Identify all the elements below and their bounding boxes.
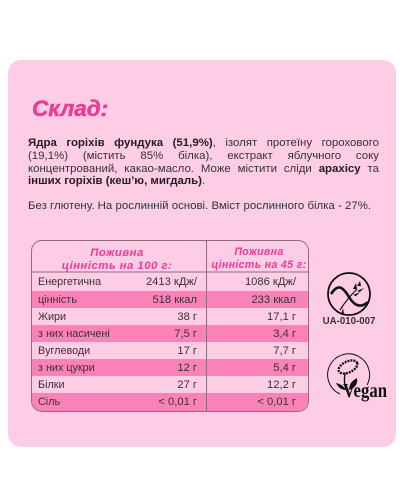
table header: per 100 g: Поживна [90, 247, 144, 259]
row: energy kcal [32, 291, 308, 308]
row: salt: < 0,01 г [158, 396, 197, 408]
table header: per 45 g: Поживна [234, 246, 284, 258]
row: energy kcal: 233 ккал [251, 294, 296, 306]
row: protein: 27 г [177, 379, 197, 391]
row: fat: Жири [38, 311, 66, 323]
row: sugars: 5,4 г [273, 362, 296, 374]
row: carbohydrates: 17 г [177, 345, 197, 357]
panel: composition background [8, 60, 396, 447]
row: energy: 2413 кДж/ [146, 276, 197, 288]
row: sugars [32, 359, 308, 376]
row: saturates [32, 325, 308, 342]
nutrition table [31, 240, 309, 412]
text block: ingredients: Ядра горіхів фундука (51,9%), ізолят протеїну горохового [28, 137, 379, 149]
row: salt: < 0,01 г [257, 396, 296, 408]
row: carbohydrates: Вуглеводи [38, 345, 90, 357]
row: sugars: 12 г [177, 362, 197, 374]
row: saturates: 3,4 г [273, 328, 296, 340]
text block: ingredients: інших горіхів (кеш’ю, мигдаль). [28, 175, 205, 187]
row: carbohydrates: 7,7 г [273, 345, 296, 357]
row: fat: 17,1 г [267, 311, 296, 323]
icon: vegan logo [327, 353, 387, 402]
text block: ingredients: (19,1%) (містить 85% білка), екстракт яблучного соку [28, 150, 379, 162]
table header: per 100 g [62, 247, 172, 272]
table header: per 45 g: цінність на 45 г: [211, 259, 307, 271]
icon: gluten free [327, 272, 371, 316]
row: protein: 12,2 г [267, 379, 296, 391]
row: salt [32, 393, 308, 412]
row: energy: 1086 кДж/ [245, 276, 296, 288]
row: saturates: з них насичені [38, 328, 110, 340]
row: carbohydrates [38, 345, 296, 357]
label: certificate code: UA-010-007 [323, 316, 375, 327]
row: energy [38, 276, 296, 288]
text block: ingredients [28, 137, 379, 187]
table header: per 45 g [211, 246, 307, 271]
row: saturates: 7,5 г [174, 328, 197, 340]
row: salt: Сіль [38, 396, 60, 408]
row: protein [38, 379, 296, 391]
row: fat: 38 г [177, 311, 197, 323]
table header: per 100 g: цінність на 100 г: [62, 260, 172, 272]
icon: vegan logo: Vegan [343, 380, 387, 402]
row: fat [38, 311, 296, 323]
row: energy kcal: цінність [38, 294, 77, 306]
title: Склад: [32, 96, 108, 121]
text block: ingredients: концентрований, какао-масло. Може містити сліди арахісу та [28, 163, 379, 175]
row: energy kcal: 518 ккал [152, 294, 197, 306]
row: protein: Білки [38, 379, 65, 391]
row: sugars: з них цукри [38, 362, 95, 374]
row: energy: Енергетична [38, 276, 101, 288]
text block: gluten free note: Без глютену. На рослинній основі. Вміст рослинного білка - 27%. [28, 200, 371, 212]
